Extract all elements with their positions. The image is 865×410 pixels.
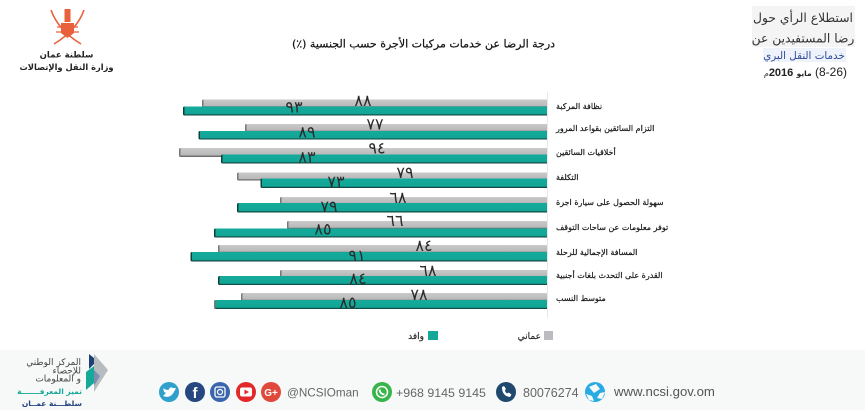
icon: facebook: f — [192, 385, 198, 402]
row: ease of getting a taxi: ٧٩ — [320, 197, 338, 216]
social icons — [159, 382, 281, 402]
row: cost — [237, 163, 578, 191]
survey heading block: (8-26) مايو 2016م — [764, 65, 847, 79]
logo: Ministry of Transport and Communications: وزارة النقل والإتصالات — [19, 62, 114, 73]
icon: youtube — [236, 382, 256, 402]
whatsapp number: +968 9145 9145 — [396, 386, 486, 400]
icon: globe — [585, 382, 605, 402]
row: average: متوسط النسب — [556, 294, 606, 303]
row: cost: ٧٣ — [327, 172, 345, 191]
row: waiting areas information — [214, 211, 668, 238]
row: foreign languages: ٦٨ — [419, 261, 437, 280]
row: traffic rules: ٧٧ — [366, 114, 384, 134]
logo: NCSI — [17, 354, 108, 408]
logo: Ministry of Transport and Communications — [19, 9, 114, 73]
row: cost: التكلفة — [556, 173, 578, 182]
ministry name: سلطنة عمان — [40, 50, 93, 60]
bar chart — [179, 91, 668, 318]
row: driver ethics: أخلاقيات السائقين — [556, 147, 616, 157]
logo: NCSI: المركز الوطني — [26, 358, 81, 368]
row: traffic rules — [198, 114, 654, 142]
row: cost: ٧٩ — [396, 163, 414, 182]
row: cleanliness: نظافة المركبة — [556, 102, 602, 111]
title: درجة الرضا عن خدمات مركبات الأجرة حسب الجنسية (٪) — [292, 36, 555, 50]
logo: NCSI: تميز المعرفـــــــة — [17, 387, 82, 396]
row: driver ethics: ٩٤ — [368, 138, 386, 158]
row: waiting areas information: ٨٥ — [314, 220, 332, 238]
row: waiting areas information: ٦٦ — [386, 211, 404, 230]
row: ease of getting a taxi — [237, 188, 664, 216]
row: total trip distance — [190, 236, 637, 265]
legend: عماني — [518, 332, 541, 342]
row: foreign languages: القدرة على التحدث بلغات أجنبية — [556, 270, 663, 280]
icon: Oman emblem — [51, 9, 84, 44]
icon: whatsapp — [372, 382, 392, 402]
row: total trip distance: المسافة الإجمالية للرحلة — [556, 248, 637, 258]
row: total trip distance: ٨٤ — [415, 236, 433, 255]
legend: وافد — [408, 332, 424, 342]
logo: NCSI: سلطـــنة عمــان — [22, 399, 82, 408]
footer band — [0, 350, 865, 410]
survey heading block: رضا المستفيدين عن — [752, 32, 854, 46]
row: cleanliness — [183, 91, 602, 116]
icon: twitter — [159, 382, 179, 402]
survey heading block — [752, 6, 855, 79]
phone number: 80076274 — [523, 386, 579, 400]
row: waiting areas information: توفر معلومات عن ساحات التوقف — [556, 223, 668, 232]
row: cleanliness: ٨٨ — [354, 91, 372, 110]
icon: google plus: G+ — [264, 388, 278, 399]
row: ease of getting a taxi: سهولة الحصول على سيارة اجرة — [556, 198, 664, 207]
row: average: ٨٥ — [339, 293, 357, 312]
logo: NCSI: للإحصاء — [53, 366, 81, 376]
social handle: @NCSIOman — [287, 386, 359, 400]
icon: instagram — [210, 382, 230, 402]
row: average — [214, 285, 606, 312]
survey heading block: استطلاع الرأي حول — [753, 10, 853, 26]
row: foreign languages: ٨٤ — [349, 269, 367, 288]
logo: NCSI: و المعلومات — [35, 374, 81, 384]
icon: phone — [496, 382, 516, 402]
row: foreign languages — [218, 261, 663, 288]
website: www.ncsi.gov.om — [613, 384, 715, 399]
legend — [408, 331, 553, 342]
survey heading block: خدمات النقل البري — [763, 50, 845, 62]
row: traffic rules: التزام السائقين بقواعد المرور — [555, 124, 654, 133]
row: traffic rules: ٨٩ — [298, 122, 316, 142]
row: driver ethics: ٨٣ — [298, 148, 316, 166]
row: driver ethics — [179, 138, 616, 166]
row: cleanliness: ٩٣ — [285, 98, 303, 116]
row: total trip distance: ٩١ — [348, 246, 366, 265]
row: average: ٧٨ — [410, 285, 428, 304]
row: ease of getting a taxi: ٦٨ — [389, 188, 407, 207]
